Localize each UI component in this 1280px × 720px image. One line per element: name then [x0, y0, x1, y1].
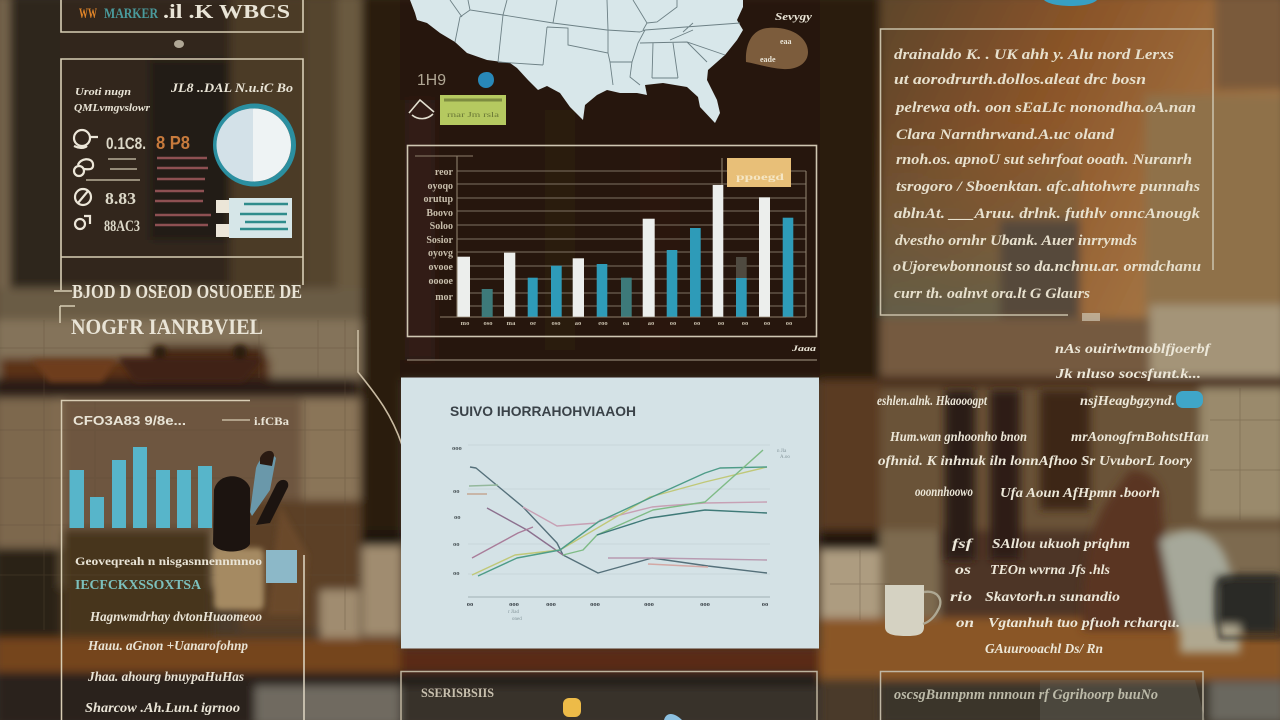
label: white heading: .il .K WBCS: [163, 1, 290, 23]
wire arc: [358, 330, 402, 445]
right text lines: ut aorodrurth.dollos.aleat drc bosn: [894, 72, 1146, 88]
text block: right lower: Vgtanhuh tuo pfuoh rcharqu.: [988, 616, 1180, 631]
bar chart x axis labels: eoo: [598, 320, 608, 327]
right text lines: Clara Narnthrwand.A.uc oland: [896, 127, 1115, 143]
line chart y labels: [452, 445, 462, 577]
left lower text 6: Sharcow .Ah.Lun.t igrnoo: [85, 701, 240, 716]
right text lines: tsrogoro / Sboenktan. afc.ahtohwre punnahs: [896, 179, 1200, 195]
panel: donut and metrics: [61, 59, 303, 290]
text block: right lower: Skavtorh.n sunandio: [985, 590, 1120, 605]
metric rule lines: [86, 158, 211, 225]
line chart legend: n Jla: [777, 449, 787, 454]
text block: right lower: Jk nluso socsfunt.k...: [1055, 367, 1201, 382]
bar chart x axis labels: [461, 320, 792, 327]
right text lines: oUjorewbonnoust so da.nchnu.ar. ormdchanu: [893, 259, 1201, 275]
bar chart x axis labels: oo: [764, 320, 770, 327]
bar chart y axis labels: [424, 167, 454, 303]
map: United States: [410, 0, 743, 123]
panel: bar chart: [408, 146, 816, 336]
right text lines: [893, 47, 1201, 302]
heading line 2: NOGFR IANRBVIEL: [71, 314, 263, 339]
shelf bowls: [32, 345, 263, 382]
panel: line chart: [401, 378, 819, 648]
line chart y labels: oo: [453, 570, 460, 577]
line chart x labels: ooo: [644, 601, 654, 608]
line chart x labels: oo: [762, 601, 768, 608]
bar chart y axis labels: oyovg: [428, 248, 453, 259]
line chart legend: oned: [512, 617, 522, 622]
left lower side label: [222, 414, 289, 428]
bar chart x axis labels: oso: [551, 320, 561, 327]
icon: house: [409, 100, 434, 119]
text block: right lower: nAs ouiriwtmoblfjoerbf: [1055, 342, 1212, 357]
left lower text 4: Hauu. aGnon +Uanarofohnp: [87, 639, 248, 654]
text block: right lower: Hum.wan gnhoonho bnon: [889, 430, 1027, 445]
text block: right lower: ofhnid. K inhnuk iln lonnAfhoo Sr UvuborL Ioory: [878, 454, 1193, 469]
text block: right lower: [877, 342, 1212, 657]
small tab marker: [1082, 313, 1100, 321]
text block: right lower: os: [955, 563, 972, 578]
bar chart x axis labels: oso: [483, 320, 493, 327]
right text lines: drainaldo K. . UK ahh y. Alu nord Lerxs: [894, 47, 1174, 63]
text block: right lower: GAuurooachl Ds/ Rn: [985, 642, 1103, 657]
text block: right lower: Ufa Aoun AfHpmn .boorh: [1000, 486, 1160, 501]
map state borders: [450, 0, 740, 85]
utensil crock: [213, 451, 308, 615]
bar chart x axis labels: ao: [648, 320, 654, 327]
icon: round marker 1: [74, 130, 98, 148]
icon: round marker 4: [75, 216, 90, 229]
bar chart x axis labels: oo: [742, 320, 748, 327]
bar chart x axis labels: ma: [507, 320, 516, 327]
bar chart y axis labels: ooooe: [429, 276, 454, 287]
dot: [174, 40, 184, 48]
line chart grid: [468, 445, 770, 574]
bar chart y axis labels: oyoqo: [427, 181, 453, 192]
icon: yellow blob: [563, 698, 581, 717]
panel text: heading right: JL8 ..DAL N.u.iC Bo: [170, 80, 294, 95]
icon: round marker 3: [75, 189, 91, 205]
coffee cup: [885, 585, 940, 636]
panel: bottom right: [880, 672, 1205, 720]
bar chart x axis labels: oe: [530, 320, 536, 327]
left lower text 1: Geoveqreah n nisgasnnennmnoo: [75, 554, 262, 568]
text block: right lower: eshlen.alnk. Hkaooogpt: [877, 394, 988, 409]
pill: blue marker: [1176, 391, 1203, 408]
callout: brown bubble: eade: [760, 55, 776, 64]
metric value 1: 0.1C8.: [106, 134, 146, 153]
right text lines: rnoh.os. apnoU sut sehrfoat ooath. Nuranrh: [896, 152, 1192, 168]
left lower side label: i.fCBa: [254, 414, 289, 428]
label: teal tag: MARKER: [104, 6, 158, 22]
bottom centre label: SSERISBSIIS: [421, 685, 494, 700]
line chart x labels: ooo: [590, 601, 600, 608]
kettle appliance: [1217, 578, 1280, 638]
line chart axis: [468, 596, 770, 598]
line chart x labels: ooo: [546, 601, 556, 608]
panel text: heading left: Uroti nugn: [75, 86, 131, 98]
callout: yellow note: [727, 158, 791, 187]
note card: green: [440, 95, 506, 125]
panel text: heading left second line: QMLvmgvslowr: [74, 103, 150, 114]
line chart legend: [508, 449, 790, 622]
note card: blue square: [266, 550, 297, 583]
icon: teal oval top: [1044, 0, 1097, 6]
line chart y labels: oo: [453, 488, 460, 495]
text block: right lower: ooonnhoowo: [915, 485, 973, 500]
icon: blue shape: [664, 714, 682, 720]
right text lines: dvestho ornhr Ubank. Auer inrrymds: [895, 233, 1137, 249]
right text lines: pelrewa oth. oon sEaLIc nonondha.oA.nan: [894, 100, 1196, 116]
bar chart y axis labels: Soloo: [430, 221, 453, 232]
line chart y labels: ooo: [452, 445, 462, 452]
text block: right lower: rio: [950, 590, 972, 605]
icon: round marker 2: [74, 159, 93, 176]
bar chart x axis labels: oo: [670, 320, 676, 327]
left lower text 3: Hagnwmdrhay dvtonHuaomeoo: [89, 610, 262, 625]
legend number: 1H9: [417, 72, 446, 89]
panel: bottom centre: [401, 672, 817, 720]
callout: yellow note: ppoegd: [736, 172, 784, 182]
bar chart y axis labels: orutup: [424, 194, 453, 205]
line chart y labels: oo: [454, 514, 460, 521]
bar chart y axis labels: mor: [435, 292, 454, 303]
heading line 1: BJOD D OSEOD OSUOEEE DE: [72, 281, 302, 303]
line chart x labels: [467, 601, 768, 608]
bar chart x axis labels: ao: [575, 320, 581, 327]
bar chart y axis labels: reor: [435, 167, 454, 178]
metric value highlight: 8 P8: [156, 133, 190, 153]
right text lines: ablnAt. ___Aruu. drlnk. futhlv onncAnougk: [894, 206, 1201, 222]
text block: right lower: on: [956, 616, 974, 631]
panel: top-left header: [61, 0, 303, 32]
text block: right lower: TEOn wvrna Jfs .hls: [990, 563, 1111, 578]
note card: green: rnar Jm rsla: [447, 111, 500, 119]
line chart x labels: ooo: [509, 601, 519, 608]
bar chart x axis labels: oo: [694, 320, 700, 327]
line chart series: [467, 450, 767, 576]
callout: brown bubble: [746, 28, 808, 69]
line chart x labels: oo: [467, 601, 473, 608]
bar chart gridlines: [415, 156, 806, 317]
bar chart x axis labels: oo: [718, 320, 724, 327]
mini legend card: [216, 198, 292, 238]
panel: right text block: [880, 29, 1213, 315]
map side note: small label: Sevygy: [775, 12, 813, 23]
line chart title: SUIVO IHORRAHOHVIAAOH: [450, 403, 636, 419]
metric value 3: 88AC3: [104, 218, 140, 235]
text block: right lower: fsf: [952, 537, 974, 552]
bar chart footer note: Jaaa: [790, 344, 816, 353]
line chart y labels: oo: [453, 541, 460, 548]
bar chart x axis labels: oa: [623, 320, 630, 327]
metric value 2: 8.83: [105, 189, 136, 208]
bar chart x axis labels: mo: [461, 320, 469, 327]
line chart legend: A.oo: [780, 455, 790, 460]
bar chart y axis labels: Boovo: [426, 208, 453, 219]
text block: right lower: nsjHeagbgzynd.: [1080, 394, 1175, 409]
mini bar chart: [70, 447, 212, 528]
right text lines: curr th. oalnvt ora.lt G Glaurs: [894, 286, 1090, 302]
icon: blue blob: [478, 72, 494, 88]
bar chart bars: [458, 185, 793, 317]
text block: right lower: mrAonogfrnBohtstHan: [1071, 430, 1209, 445]
bar chart y axis labels: ovooe: [429, 262, 454, 273]
callout: brown bubble: eaa: [780, 37, 792, 46]
wall tile grid: [0, 320, 1280, 630]
left lower text 2 teal: IECFCKXSSOXTSA: [75, 578, 202, 593]
line chart legend: r Jlad: [508, 610, 519, 615]
label: orange tag: WW: [79, 6, 97, 22]
bottom right text: oscsgBunnpnm nnnoun rf Ggrihoorp buuNo: [894, 687, 1158, 703]
line chart x labels: ooo: [700, 601, 710, 608]
left lower title: CFO3A83 9/8e...: [73, 413, 186, 428]
donut chart: [216, 106, 294, 184]
left lower text 5: Jhaa. ahourg bnuypaHuHas: [87, 670, 245, 685]
bar chart y axis labels: Sosior: [426, 235, 454, 246]
text block: right lower: SAllou ukuoh priqhm: [992, 537, 1130, 552]
bar chart x axis labels: oo: [786, 320, 792, 327]
panel: left lower: [62, 400, 304, 720]
heading block: left: [54, 281, 302, 339]
